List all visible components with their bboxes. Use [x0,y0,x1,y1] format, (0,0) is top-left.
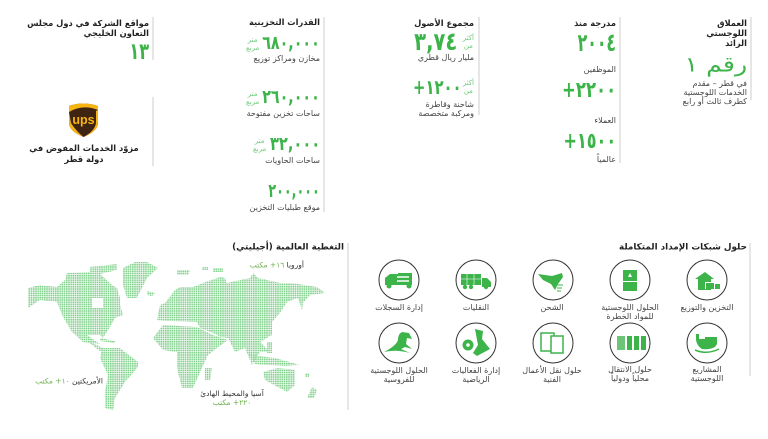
panel: listed since [562,18,616,164]
description: كطرف ثالث أو رابع [683,97,747,106]
label: storage and distribution: التخزين والتوزيع [681,303,733,312]
heading: storage capabilities: القدرات التخزينية [249,17,320,27]
map: new zealand [305,373,317,398]
label: customers: العملاء [594,116,616,125]
label: pallet positions: موقع طبليات التخزين [250,203,320,212]
heading: leading logistics giant [706,18,747,48]
label: equestrian [370,366,428,384]
unit: more than: أكثر [463,34,474,42]
text: authorized provider: مزوّد الخدمات المفوض في [29,143,139,153]
icon: UPS logo: ups [72,113,95,127]
panel: GCC locations [27,18,149,65]
icon: hazardous materials fridge [610,260,650,300]
heading: leading logistics giant: اللوجستي [706,28,747,38]
number 13: ١٣ [129,39,149,65]
label: Asia Pacific: ٢٢٠+ مكتب [213,398,251,407]
panel: storage capabilities [246,17,320,212]
panel: UPS provider [29,104,139,164]
number 32000: ٣٢,٠٠٠ [270,133,320,155]
map: madagascar [205,368,212,380]
heading: GCC locations [27,18,149,38]
label: moving: محلياً ودولياً [611,374,649,383]
unit: sqm: متر [248,90,258,98]
unit: sqm [253,137,266,153]
label: sports events [452,366,500,384]
label: Asia Pacific: آسيا والمحيط الهادئ [200,389,264,398]
label: equestrian: الحلول اللوجستية [370,366,428,375]
icon: cargo ship [687,323,727,363]
label: billion riyal: مليار ريال قطري [418,53,474,62]
icon: horse [379,323,419,363]
icon: freight plane [533,260,573,300]
number 680000: ٦٨٠,٠٠٠ [262,32,320,54]
icon: sports boot and ball [456,323,496,363]
label: fine art [522,365,582,384]
label: transportation: النقليات [463,303,489,312]
label: fine art: الفنية [543,375,561,384]
unit: more than [462,33,474,50]
number vehicles: +١٢٠٠ [413,75,462,99]
label: Asia Pacific [200,389,264,407]
label: moving [608,365,652,384]
label: vehicles: شاحنة وقاطرة [426,100,474,109]
panel: leading logistics [683,18,747,106]
heading: GCC locations: مواقع الشركة في دول مجلس [27,18,149,28]
description: في قطر – مقدم [693,79,747,88]
text: authorized provider: دولة قطر [64,154,104,164]
map: eurasia [157,273,325,365]
icon: records management van [379,260,419,300]
label: sports events: الرياضية [462,375,490,384]
map: arctic islands [177,267,223,275]
unit: sqm [246,90,259,106]
number 260000: ٢٦٠,٠٠٠ [262,86,320,108]
icon: warehouse and truck [687,260,727,300]
icon: UPS logo [69,104,98,137]
label: hazardous materials: للمواد الخطرة [606,312,654,321]
map: australia [263,368,295,392]
label: worldwide: عالمياً [597,155,616,164]
map: north america [28,264,123,344]
unit: sqm: متر [248,36,258,44]
heading: leading logistics giant: الرائد [725,38,747,48]
unit: sqm: مربع [253,145,266,153]
map: asia pacific islands [250,342,300,366]
description: الخدمات اللوجستية [684,88,747,97]
unit: more than: أكثر [463,79,474,87]
label: fine art: حلول نقل الأعمال [522,366,582,375]
label: logistics projects: اللوجستية [691,374,723,383]
label: logistics projects: المشاريع [692,365,722,374]
label: employees: الموظفين [584,65,616,74]
label: vehicles [418,100,474,118]
map: central america and caribbean [87,338,115,351]
number one: رقم ١ [684,52,747,76]
label: open yards: ساحات تخزين مفتوحة [247,109,320,118]
number employees: +٢٢٠٠ [562,78,616,103]
unit: sqm: مربع [246,98,259,106]
number assets: ٣,٧٤ [414,27,457,56]
number 2004: ٢٠٠٤ [578,28,616,57]
icon: truck [456,260,496,300]
unit: sqm [246,36,259,52]
description [683,79,747,106]
icon: fine art frames [533,323,573,363]
label: sports events: إدارة الفعاليات [452,366,500,375]
label: warehouses: مخازن ومراكز توزيع [254,54,320,63]
number customers: +١٥٠٠ [563,129,616,154]
heading: total assets: مجموع الأصول [414,18,474,28]
label: hazardous materials: الحلول اللوجستية [601,303,659,312]
heading: listed since: مدرجة منذ [574,18,616,28]
unit: sqm: متر [255,137,265,145]
label: container yards: ساحات الحاويات [265,156,320,165]
heading: GCC locations: التعاون الخليجي [84,28,149,38]
label: Americas: الأمريكتين ١٠+ مكتب [35,376,103,385]
panel: total assets [413,18,474,118]
label: Europe: أوروبا ١٦+ مكتب [250,260,304,269]
map: greenland [123,262,158,298]
heading: integrated supply chain: حلول شبكات الإمداد المتكاملة [619,243,747,253]
map: south america [100,348,138,410]
unit: more than: من [464,42,473,50]
label: records management: إدارة السجلات [375,303,423,312]
unit: more than: من [464,87,473,95]
label: equestrian: للفروسية [384,375,414,384]
unit: more than [462,78,474,95]
label: vehicles: ومركبة متخصصة [418,109,474,118]
label: logistics projects [691,365,723,384]
heading: global coverage: التغطية العالمية (أجيليتي) [232,243,344,253]
number 200000: ٢٠٠,٠٠٠ [269,180,320,202]
unit: sqm: مربع [246,44,259,52]
text: authorized provider [29,143,139,164]
heading: leading logistics giant: العملاق [717,18,747,28]
icon: moving files [610,323,650,363]
map: africa [153,325,228,388]
label: freight: الشحن [540,303,564,312]
label: moving: حلول الانتقال [608,365,652,374]
label: hazardous materials [601,303,659,322]
